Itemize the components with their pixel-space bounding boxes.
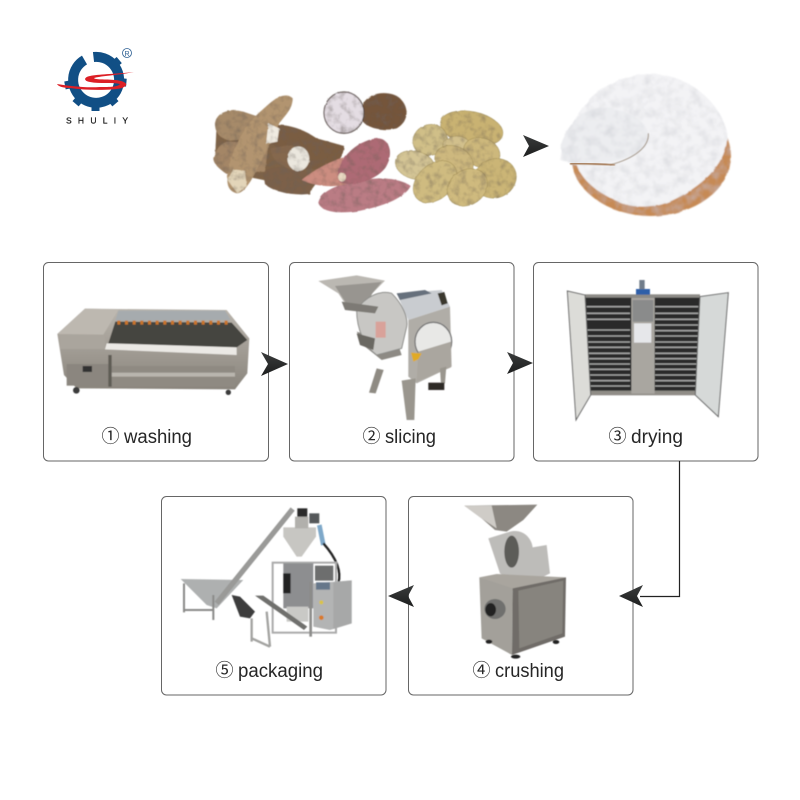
wooden bowl <box>571 96 731 216</box>
label: crushing: crushing <box>495 661 564 682</box>
panel: packaging <box>162 496 386 695</box>
image: cassava, taro, sweet potatoes and potatoes <box>213 92 523 214</box>
taro <box>324 92 407 133</box>
panel: crushing <box>408 496 633 695</box>
logo: Shuliy gear <box>57 48 134 126</box>
label: crushing: ④ <box>472 660 490 680</box>
panel: drying <box>534 262 758 461</box>
connector: drying down to crushing <box>640 461 680 596</box>
potatoes <box>392 105 523 214</box>
label: drying: ③ <box>608 426 626 446</box>
image: bowl of starch flour <box>560 74 731 216</box>
label: drying: drying <box>631 427 683 448</box>
machine: slicer <box>318 275 452 420</box>
label: slicing: slicing <box>385 427 436 448</box>
machine: powder packaging line <box>181 508 352 647</box>
machine: washing and peeling machine <box>57 309 249 395</box>
label: drying <box>608 426 683 448</box>
brand name: SHULIY <box>66 116 128 126</box>
panel: washing <box>44 262 268 461</box>
panel: slicing <box>290 262 514 461</box>
label: slicing <box>362 426 436 448</box>
sweet potatoes <box>302 138 411 212</box>
machine: hot-air dryer <box>567 280 728 420</box>
arrow: crushing to packaging <box>388 585 414 607</box>
arrow: into crushing <box>619 585 643 607</box>
arrow: slicing to drying <box>507 352 533 374</box>
spoon of flour <box>561 108 649 163</box>
label: slicing: ② <box>362 426 380 446</box>
registered mark: R <box>124 51 130 58</box>
machine: universal crusher <box>464 505 566 659</box>
flour <box>560 74 727 207</box>
gear ring <box>64 57 127 111</box>
red S swoosh <box>57 72 134 90</box>
label: washing: washing <box>123 427 192 448</box>
arrow: washing to slicing <box>261 352 288 376</box>
cassava pile <box>213 95 344 194</box>
arrow: to flour <box>523 135 549 157</box>
label: packaging: packaging <box>238 661 323 682</box>
label: washing: ① <box>102 426 120 446</box>
label: packaging: ⑤ <box>216 660 234 680</box>
